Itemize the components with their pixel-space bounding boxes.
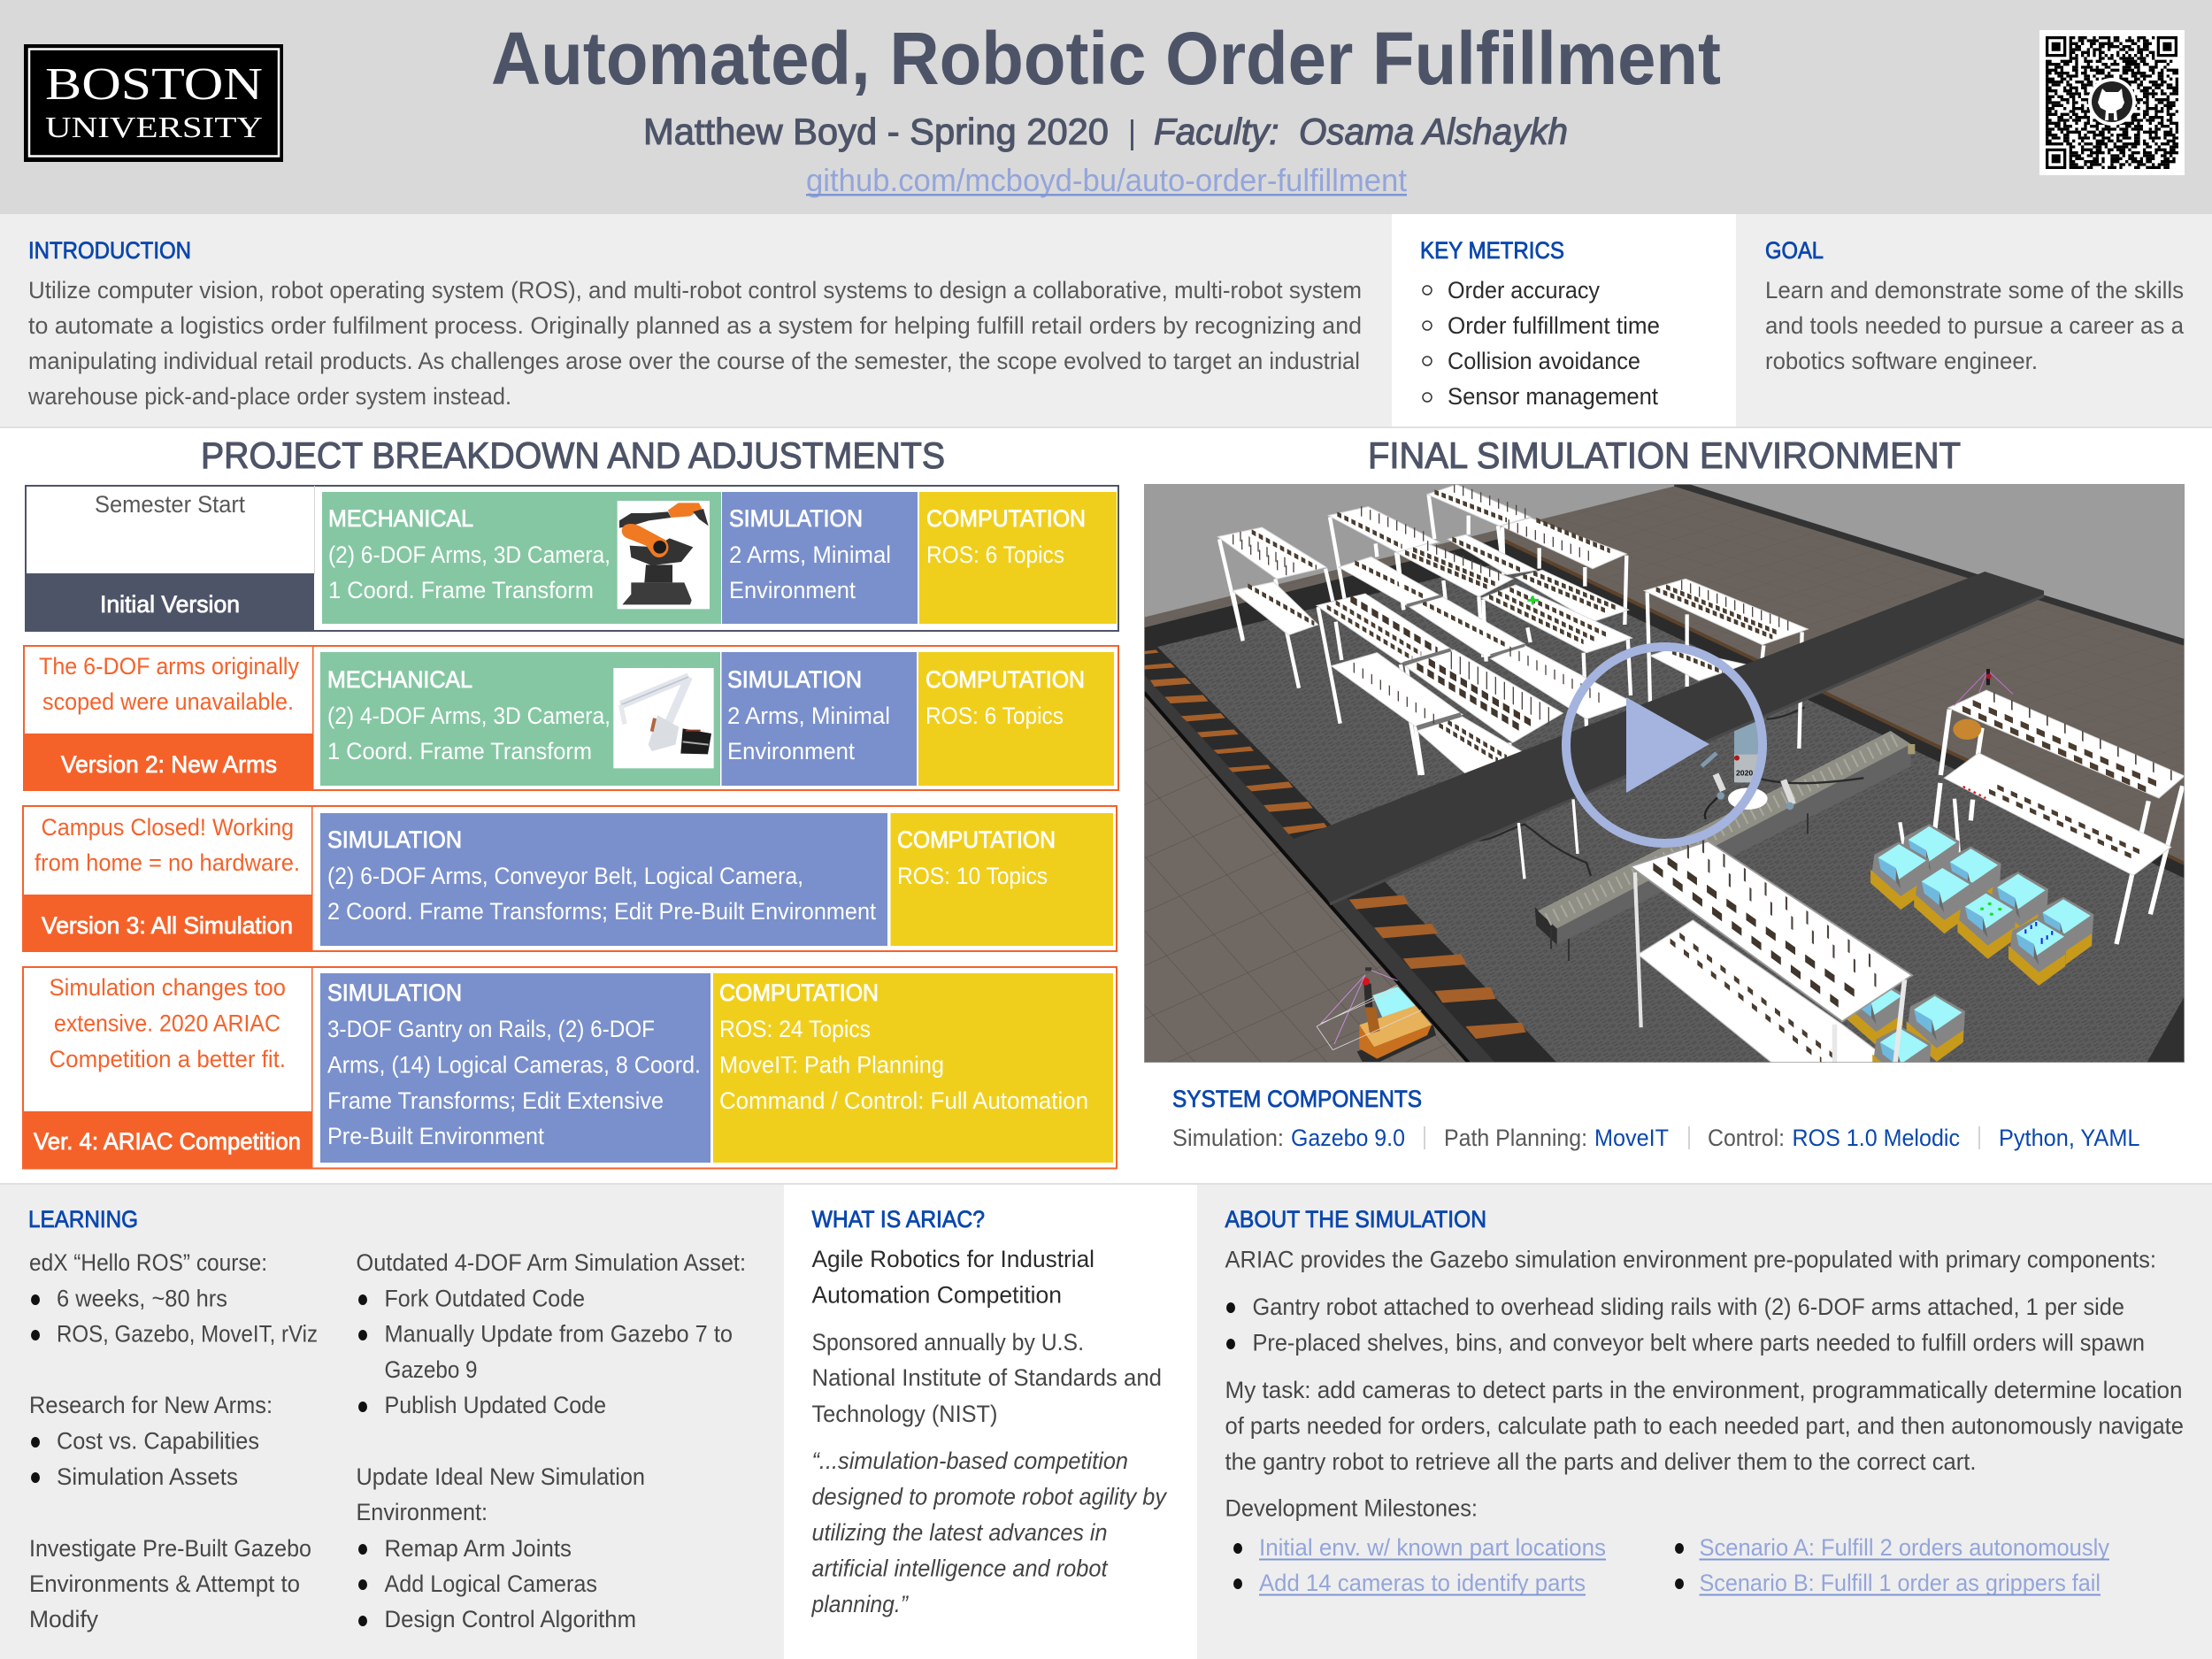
list: components in use: Path Planning:	[1444, 1125, 1587, 1151]
column: learning right: Design Control Algorithm	[384, 1606, 636, 1632]
quote: “...simulation-based competition	[812, 1448, 1128, 1474]
box: simulation: Frame Transforms; Edit Extensive	[327, 1087, 664, 1114]
header band	[0, 0, 2212, 214]
box: computation: COMPUTATION	[719, 979, 879, 1006]
column: learning right: Fork Outdated Code	[384, 1285, 585, 1311]
box: computation	[918, 652, 1114, 786]
gantry robot	[1701, 719, 1793, 819]
box: computation: ROS: 24 Topics	[719, 1016, 871, 1042]
hazard stripes	[1144, 649, 1526, 1039]
column: learning left: 6 weeks, ~80 hrs	[57, 1285, 227, 1311]
box: computation: COMPUTATION	[926, 666, 1085, 693]
quote	[811, 1448, 1167, 1617]
panel: initial version: Semester Start	[95, 491, 245, 518]
column: learning left: Environments & Attempt to	[29, 1571, 300, 1597]
quote: planning.”	[811, 1591, 909, 1617]
panel: version 4	[23, 967, 1117, 1169]
icon: white 4-DOF robot arm	[613, 668, 714, 768]
label: version 4	[23, 1111, 311, 1169]
box: simulation	[722, 492, 918, 624]
note: arms unavailable: The 6-DOF arms originally	[39, 653, 299, 680]
box: simulation: 2 Arms, Minimal	[727, 703, 890, 729]
box: mechanical	[322, 492, 721, 624]
label: initial version	[26, 573, 314, 631]
list: components in use: ROS 1.0 Melodic	[1793, 1125, 1960, 1151]
list: milestone links	[1233, 1534, 2109, 1596]
box: simulation: SIMULATION	[327, 979, 462, 1006]
box: simulation	[320, 973, 710, 1163]
logo: Boston University: UNIVERSITY	[45, 111, 263, 144]
text: goal body	[1765, 277, 2185, 374]
note: arms unavailable: scoped were unavailable.	[42, 688, 294, 715]
panel: initial version	[26, 486, 1118, 631]
list: primary components	[1226, 1294, 2145, 1356]
list: key metrics	[1423, 277, 1660, 410]
heading: project breakdown: PROJECT BREAKDOWN AND ADJUSTMENTS	[201, 434, 945, 476]
note: arms unavailable	[39, 653, 299, 715]
simulation screenshot with play button	[1144, 483, 2185, 1094]
column: learning left: Investigate Pre-Built Gazebo	[29, 1535, 311, 1562]
box: computation: ROS: 6 Topics	[926, 703, 1064, 729]
box: simulation: Arms, (14) Logical Cameras, 8 Coord.	[327, 1051, 701, 1078]
note: ARIAC a better fit: Simulation changes too	[50, 974, 286, 1001]
label: version 2: Version 2: New Arms	[61, 751, 277, 778]
text: introduction body: manipulating individual retail products. As challenges arose over the course of the semester, the scope evolved to target an industrial	[28, 348, 1360, 374]
column: learning right: Remap Arm Joints	[384, 1535, 572, 1562]
column: learning right: Add Logical Cameras	[384, 1571, 597, 1597]
text: ARIAC intro: ARIAC provides the Gazebo simulation environment pre-populated with primary components:	[1225, 1246, 2156, 1272]
box: computation: COMPUTATION	[926, 505, 1086, 532]
list: milestone links: Scenario A: Fulfill 2 orders autonomously	[1699, 1534, 2109, 1561]
title: Automated, Robotic Order Fulfillment	[491, 17, 1721, 100]
list: key metrics: Collision avoidance	[1448, 348, 1640, 374]
text: competition name: Automation Competition	[812, 1281, 1062, 1308]
list: primary components: Pre-placed shelves, bins, and conveyor belt where parts needed to fulfill orders will spawn	[1253, 1329, 2145, 1356]
panel: version 2	[24, 646, 1118, 790]
box: computation: ROS: 6 Topics	[926, 541, 1064, 568]
box: mechanical: MECHANICAL	[328, 505, 473, 532]
text: development milestones heading: Development Milestones:	[1225, 1495, 1478, 1522]
heading: system components: SYSTEM COMPONENTS	[1172, 1086, 1422, 1112]
cables	[1478, 707, 1863, 876]
box: simulation: SIMULATION	[327, 826, 462, 853]
box: computation: Command / Control: Full Automation	[719, 1087, 1088, 1114]
list: milestone links: Initial env. w/ known part locations	[1259, 1534, 1606, 1561]
panel: version 3	[23, 806, 1117, 951]
text: sponsor	[812, 1329, 1162, 1427]
heading: what is ARIAC: WHAT IS ARIAC?	[812, 1206, 985, 1233]
panel: learning	[0, 1185, 784, 1659]
repository link: github.com/mcboyd-bu/auto-order-fulfillment	[806, 162, 1407, 198]
QR code	[2039, 30, 2185, 175]
panel: key metrics	[1392, 214, 1736, 426]
back right shelf	[1644, 579, 1959, 855]
column: learning left: Cost vs. Capabilities	[57, 1428, 259, 1455]
note: ARIAC a better fit	[50, 974, 286, 1072]
heading: learning: LEARNING	[28, 1206, 138, 1233]
icon: play button	[1566, 647, 1763, 843]
text: sponsor: Technology (NIST)	[812, 1401, 998, 1427]
panel: introduction	[0, 214, 1392, 427]
second-row shelves	[1328, 507, 1633, 726]
box: mechanical: 1 Coord. Frame Transform	[327, 738, 592, 764]
label: version 3	[23, 895, 311, 951]
note: ARIAC a better fit: Competition a better fit.	[50, 1046, 286, 1072]
note: campus closed: from home = no hardware.	[35, 849, 300, 876]
text: competition name	[812, 1246, 1094, 1308]
heading: goal: GOAL	[1765, 237, 1824, 264]
list: components in use	[1172, 1125, 2139, 1151]
top centre shelves	[1427, 485, 1631, 695]
box: mechanical: 1 Coord. Frame Transform	[328, 577, 594, 603]
box: simulation	[722, 652, 917, 786]
label: version 4: Ver. 4: ARIAC Competition	[34, 1128, 301, 1155]
box: mechanical: MECHANICAL	[327, 666, 472, 693]
label: version 2	[24, 733, 312, 790]
text: goal body: and tools needed to pursue a career as a	[1765, 312, 2185, 339]
dark floor	[1144, 539, 2185, 1063]
column: learning left	[29, 1249, 318, 1632]
box: simulation: Environment	[729, 577, 856, 603]
box: simulation: 3-DOF Gantry on Rails, (2) 6-DOF	[327, 1016, 655, 1042]
box: computation	[713, 973, 1113, 1163]
far left shelf	[1217, 527, 1333, 688]
logo: Boston University: BOSTON	[45, 59, 263, 110]
icon: orange 6-DOF robot arm	[618, 501, 710, 609]
list: key metrics: Order fulfillment time	[1448, 312, 1660, 339]
list: components in use: Gazebo 9.0	[1291, 1125, 1405, 1151]
subtitle: author and faculty	[643, 111, 1568, 152]
list: milestone links: Add 14 cameras to identify parts	[1259, 1570, 1586, 1596]
box: mechanical	[320, 652, 720, 786]
text: my task: the gantry robot to retrieve all the parts and deliver them to the correct cart.	[1225, 1448, 1977, 1475]
quote: designed to promote robot agility by	[812, 1483, 1167, 1509]
text: goal body: Learn and demonstrate some of the skills	[1765, 277, 2184, 303]
note: ARIAC a better fit: extensive. 2020 ARIAC	[54, 1010, 280, 1037]
box: mechanical: (2) 6-DOF Arms, 3D Camera,	[328, 541, 611, 568]
box: computation: ROS: 10 Topics	[897, 863, 1048, 889]
column: learning left: Simulation Assets	[57, 1463, 238, 1490]
column: learning right: Update Ideal New Simulation	[356, 1463, 645, 1490]
heading: about the simulation: ABOUT THE SIMULATION	[1225, 1206, 1486, 1233]
subtitle: author and faculty: Matthew Boyd - Spring 2020	[643, 111, 1109, 152]
gantry beam	[1288, 572, 2044, 903]
column: learning right: Outdated 4-DOF Arm Simulation Asset:	[356, 1249, 746, 1276]
subtitle: author and faculty: Faculty: Osama Alshaykh	[1154, 111, 1568, 152]
list: primary components: Gantry robot attached to overhead sliding rails with (2) 6-DOF arms attached, 1 per side	[1253, 1294, 2124, 1320]
note: campus closed	[35, 814, 300, 876]
text: my task	[1225, 1377, 2184, 1475]
column: learning right: Manually Update from Gazebo 7 to	[384, 1320, 733, 1347]
box: simulation: SIMULATION	[729, 505, 863, 532]
text: sponsor: National Institute of Standards and	[812, 1364, 1162, 1391]
quote: utilizing the latest advances in	[812, 1519, 1108, 1546]
cart robot	[1317, 967, 1436, 1062]
text: my task: My task: add cameras to detect parts in the environment, programmatically determine location	[1225, 1377, 2182, 1403]
text: introduction body: to automate a logistics order fulfilment process. Originally planned as a system for helping fulfill retail orders by recognizing and	[28, 312, 1362, 339]
text: goal body: robotics software engineer.	[1765, 348, 2038, 374]
list: components in use: MoveIT	[1594, 1125, 1669, 1151]
column: learning left: ROS, Gazebo, MoveIT, rViz	[57, 1320, 318, 1347]
heading: final simulation environment: FINAL SIMULATION ENVIRONMENT	[1368, 434, 1961, 476]
bins and bottom shelf	[1631, 824, 2093, 1094]
box: simulation	[320, 813, 887, 946]
box: computation: COMPUTATION	[897, 826, 1056, 853]
box: simulation: 2 Coord. Frame Transforms; Edit Pre-Built Environment	[327, 898, 876, 925]
label: version 3: Version 3: All Simulation	[42, 912, 293, 939]
outer floor	[1145, 487, 2184, 862]
heading: introduction: INTRODUCTION	[28, 237, 191, 264]
box: simulation: SIMULATION	[727, 666, 862, 693]
box: mechanical: (2) 4-DOF Arms, 3D Camera,	[327, 703, 611, 729]
text: competition name: Agile Robotics for Industrial	[812, 1246, 1094, 1272]
list: key metrics: Order accuracy	[1448, 277, 1600, 303]
note: campus closed: Campus Closed! Working	[41, 814, 294, 841]
column: learning right	[356, 1249, 746, 1632]
panel: goal	[1736, 214, 2212, 427]
column: learning right: Gazebo 9	[384, 1356, 478, 1383]
box: simulation: Environment	[727, 738, 855, 764]
logo: Boston University	[24, 44, 283, 162]
column: learning left: Research for New Arms:	[29, 1392, 273, 1418]
box: simulation: Pre-Built Environment	[327, 1123, 544, 1149]
right shelf	[1935, 669, 2185, 944]
text: introduction body	[27, 277, 1362, 410]
list: key metrics: Sensor management	[1448, 383, 1658, 410]
column: learning left: Modify	[29, 1606, 98, 1632]
column: learning right: Environment:	[356, 1499, 488, 1525]
text: sponsor: Sponsored annually by U.S.	[812, 1329, 1084, 1356]
column: learning right: Publish Updated Code	[384, 1392, 606, 1418]
box: simulation: (2) 6-DOF Arms, Conveyor Belt, Logical Camera,	[327, 863, 803, 889]
panel: what is ARIAC	[784, 1185, 1197, 1659]
panel: about the simulation	[1197, 1185, 2212, 1659]
box: computation: MoveIT: Path Planning	[719, 1051, 944, 1078]
text: introduction body: Utilize computer vision, robot operating system (ROS), and multi-robot control systems to design a collaborative, multi-robot system	[28, 277, 1362, 303]
text: introduction body: warehouse pick-and-place order system instead.	[27, 383, 511, 410]
large front-left shelves	[1317, 594, 1563, 775]
conveyor belt	[1535, 731, 1915, 961]
list: components in use: Simulation:	[1172, 1125, 1284, 1151]
box: computation	[919, 492, 1117, 624]
quote: artificial intelligence and robot	[812, 1555, 1109, 1582]
text block: system components	[1172, 1086, 2139, 1151]
box: computation	[890, 813, 1113, 946]
label: initial version: Initial Version	[100, 591, 240, 618]
column: learning left: edX “Hello ROS” course:	[29, 1249, 267, 1276]
text: my task: of parts needed for orders, calculate path to each needed part, and then autonomously navigate	[1225, 1412, 2184, 1439]
box: simulation: 2 Arms, Minimal	[729, 541, 891, 568]
list: milestone links: Scenario B: Fulfill 1 order as grippers fail	[1699, 1570, 2101, 1596]
list: components in use: Python, YAML	[1999, 1125, 2139, 1151]
wall edge	[1675, 483, 2185, 642]
gantry robot: 2020	[1736, 769, 1753, 778]
list: components in use: Control:	[1708, 1125, 1785, 1151]
heading: key metrics: KEY METRICS	[1420, 237, 1564, 264]
